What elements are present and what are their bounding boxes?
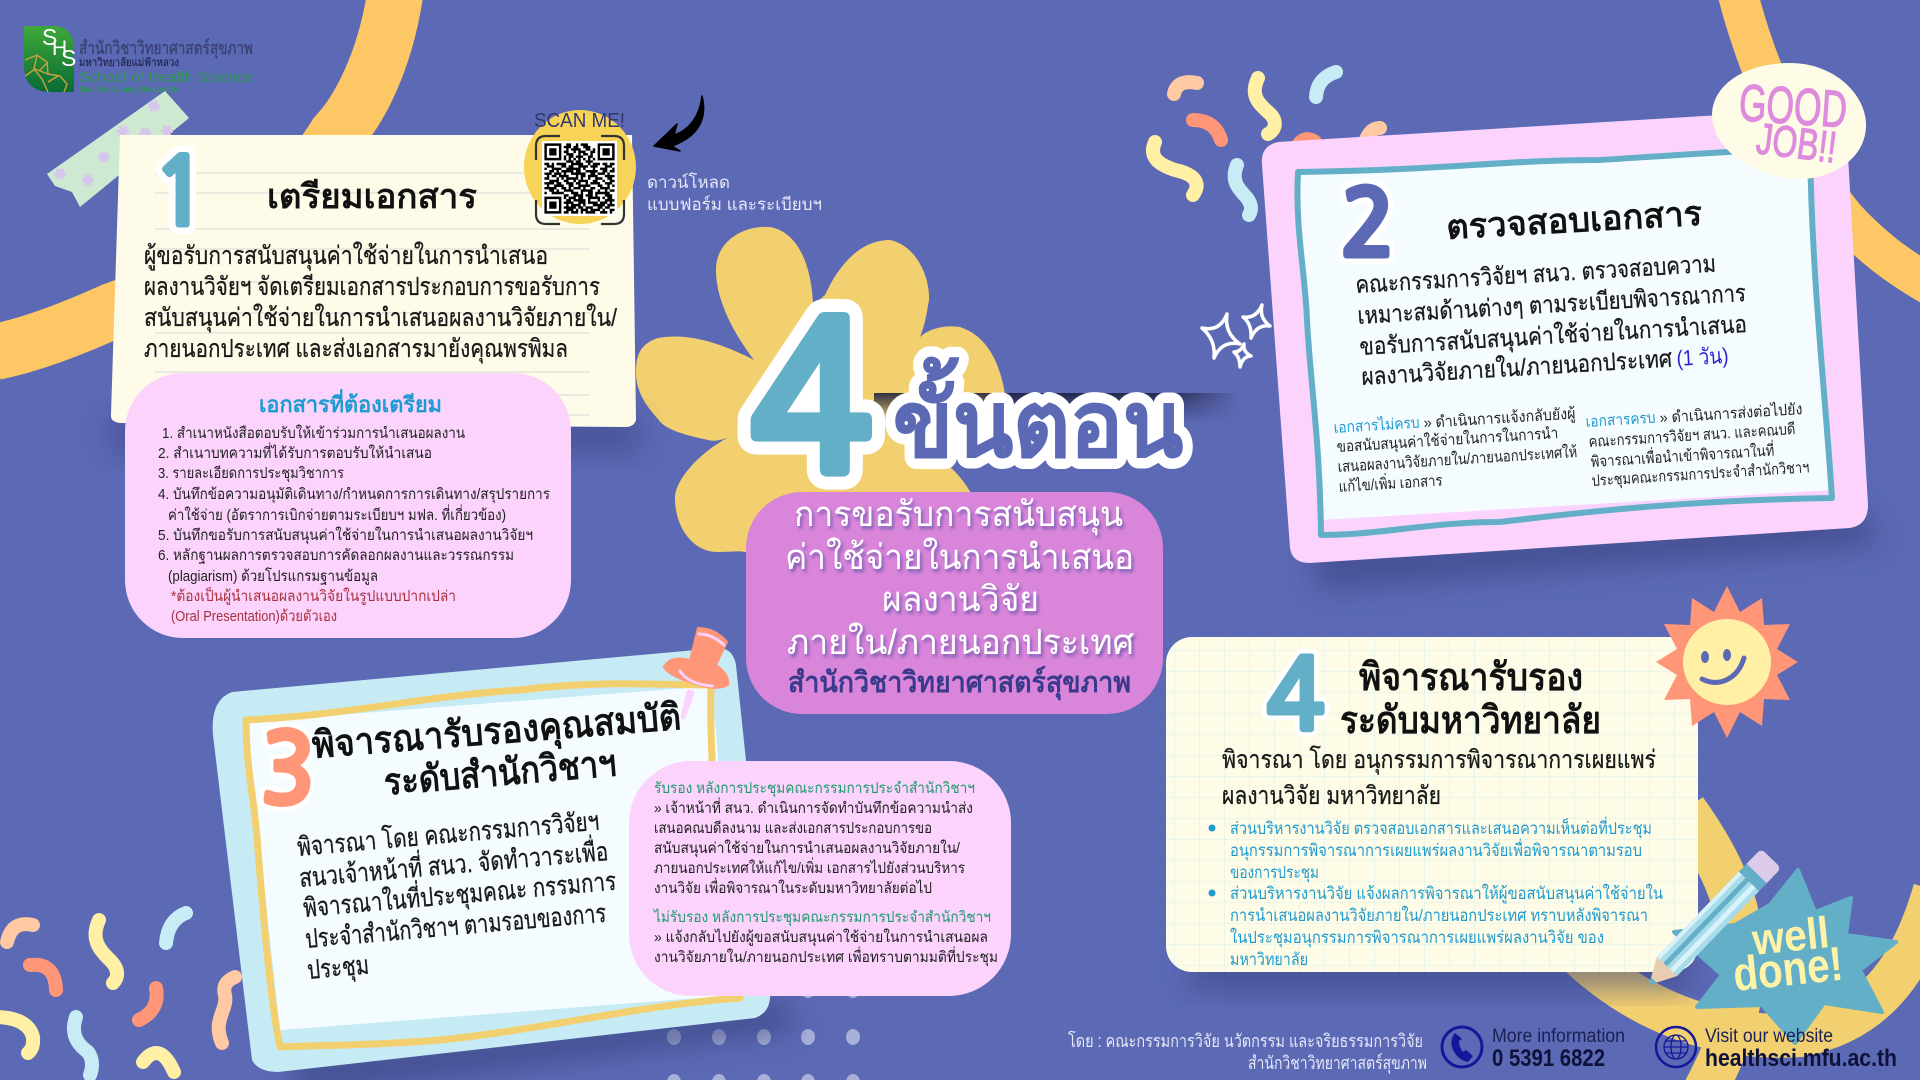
approved note: งานวิจัย เพื่อพิจารณาในระดับมหาวิทยาลัยต่อไป	[654, 877, 932, 897]
step 4 title: ระดับมหาวิทยาลัย	[1340, 700, 1601, 742]
approved note: เสนอคณบดีลงนาม และส่งเอกสารประกอบการขอ	[654, 820, 932, 837]
documents title: เอกสารที่ต้องเตรียม	[259, 388, 442, 417]
step 4 bullets	[1208, 816, 1663, 969]
credit text	[1068, 1030, 1427, 1074]
documents list: ค่าใช้จ่าย (อัตราการเบิกจ่ายตามระเบียบฯ มฟล. ที่เกี่ยวข้อง)	[168, 504, 506, 524]
step 4 title	[1340, 657, 1601, 742]
number 2: 2	[1340, 179, 1396, 270]
number 3: 3	[260, 723, 316, 819]
not approved note: งานวิจัยภายใน/ภายนอกประเทศ เพื่อทราบตามมติที่ประชุม	[654, 946, 998, 967]
good job badge: JOB!!	[1754, 114, 1839, 173]
panel: step 4	[1166, 637, 1698, 972]
icon: phone	[1442, 1027, 1482, 1067]
card 2 teal border	[1297, 148, 1832, 535]
panel: step 3	[213, 648, 770, 1072]
icon: pencil	[1639, 849, 1781, 995]
well done star	[1674, 870, 1896, 1043]
pushpin	[664, 628, 728, 717]
logo	[24, 24, 253, 94]
title: steps word: ขั้นตอน	[893, 357, 1183, 476]
subtitle school: สำนักวิชาวิทยาศาสตร์สุขภาพ	[788, 665, 1131, 700]
one day label: (1 วัน)	[1676, 343, 1729, 371]
download caption: ดาวน์โหลด	[647, 172, 730, 192]
arrow to QR	[654, 96, 704, 151]
panel: approval notes	[629, 761, 1011, 996]
step 2 body	[1355, 251, 1748, 391]
step 1 body: สนับสนุนค่าใช้จ่ายในการนำเสนอผลงานวิจัยภายใน/	[144, 303, 617, 333]
QR brackets	[536, 136, 624, 224]
documents list: 4. บันทึกข้อความอนุมัติเดินทาง/กำหนดการการเดินทาง/สรุปรายการ	[158, 486, 550, 504]
incomplete documents note	[1333, 405, 1578, 496]
QR block	[524, 110, 636, 224]
documents list: (Oral Presentation)ด้วยตัวเอง	[171, 608, 337, 625]
number 4: 4	[1266, 648, 1325, 745]
approved note: สนับสนุนค่าใช้จ่ายในการนำเสนอผลงานวิจัยภายใน/	[654, 839, 961, 858]
approved note: » เจ้าหน้าที่ สนว. ดำเนินการจัดทำบันทึกข้อความนำส่ง	[654, 797, 973, 817]
card 3 frame	[213, 648, 770, 1072]
flower	[636, 227, 1005, 560]
website info: Visit our website	[1705, 1026, 1833, 1047]
download caption: แบบฟอร์ม และระเบียบฯ	[647, 195, 822, 214]
shadow band behind title	[874, 393, 1235, 420]
step 4 body	[1222, 745, 1656, 810]
scan me label: SCAN ME!	[534, 110, 625, 132]
documents list	[158, 424, 550, 625]
good job badge: GOOD	[1737, 74, 1849, 140]
documents list: 3. รายละเอียดการประชุมวิชาการ	[158, 465, 344, 483]
card 3 yellow border	[246, 684, 740, 1047]
logo text	[79, 38, 253, 94]
not approved note	[653, 908, 998, 967]
step 3 title: ระดับสำนักวิชาฯ	[382, 743, 618, 803]
incomplete documents note: ขอสนับสนุนค่าใช้จ่ายในการในการนำ	[1336, 424, 1559, 457]
step 4 bullets: ในประชุมอนุกรรมการพิจารณาการเผยแพร่ผลงานวิจัย ของ	[1230, 927, 1604, 948]
logo text: School of Health Science	[79, 70, 253, 86]
step 4 title: พิจารณารับรอง	[1359, 657, 1583, 699]
step 3 body: สนวเจ้าหน้าที่ สนว. จัดทำวาระเพื่อ	[298, 833, 609, 893]
QR code	[542, 141, 617, 216]
confetti bottom left	[0, 913, 235, 1075]
number 4: 4	[1266, 648, 1325, 745]
complete documents note: » ดำเนินการส่งต่อไปยัง	[1659, 400, 1803, 427]
documents list: *ต้องเป็นผู้นำเสนอผลงานวิจัยในรูปแบบปากเปล่า	[171, 586, 456, 605]
step 1 body	[144, 241, 617, 364]
step 2 body: ขอรับการสนับสนุนค่าใช้จ่ายในการนำเสนอ	[1359, 310, 1748, 362]
panel: required documents	[125, 373, 571, 638]
incomplete documents note: แก้ไข/เพิ่ม เอกสาร	[1338, 470, 1443, 496]
title: big 4: 4	[749, 299, 874, 503]
complete documents note: เอกสารครบ	[1585, 410, 1656, 431]
dot rows	[667, 982, 860, 1080]
phone info	[1492, 1026, 1625, 1072]
subtitle lines: ผลงานวิจัย	[882, 580, 1039, 619]
icon: sun	[1656, 586, 1798, 738]
step 4 bullets: ส่วนบริหารงานวิจัย ตรวจสอบเอกสารและเสนอความเห็นต่อที่ประชุม	[1230, 816, 1652, 839]
bottom right yellow arcs	[1580, 810, 1920, 1080]
logo mark: H	[52, 37, 67, 60]
panel: step 2	[1262, 108, 1868, 563]
step 3 body: พิจารณา โดย คณะกรรมการวิจัยฯ	[296, 806, 600, 862]
complete documents note	[1585, 400, 1810, 491]
logo text: มหาวิทยาลัยแม่ฟ้าหลวง	[79, 57, 179, 69]
step 3 body: พิจารณาในที่ประชุมคณะ กรรมการ	[302, 863, 617, 924]
panel: center subtitle	[746, 492, 1163, 714]
number 1: 1	[152, 147, 209, 240]
card 2 shadow	[1310, 505, 1880, 590]
icon: globe	[1656, 1027, 1696, 1067]
approved note: ภายนอกประเทศให้แก้ไข/เพิ่ม เอกสารไปยังส่วนบริหาร	[654, 857, 965, 877]
phone info: 0 5391 6822	[1492, 1045, 1605, 1072]
panel 1 shadow	[110, 414, 640, 454]
good job badge	[1712, 63, 1866, 179]
approved note	[654, 780, 975, 897]
subtitle lines	[785, 495, 1134, 662]
confetti top right	[1153, 72, 1380, 215]
title: steps word: ขั้นตอน	[893, 357, 1183, 476]
website info	[1705, 1026, 1897, 1072]
number 2: 2	[1340, 179, 1396, 270]
step 2 body: เหมาะสมด้านต่างๆ ตามระเบียบพิจารณาการ	[1357, 280, 1747, 330]
step 3 title: พิจารณารับรองคุณสมบัติ	[310, 696, 683, 769]
number 1: 1	[152, 147, 209, 240]
incomplete documents note: » ดำเนินการแจ้งกลับยังผู้	[1423, 405, 1576, 433]
panel: step 1 note	[111, 135, 636, 427]
credit text: สำนักวิชาวิทยาศาสตร์สุขภาพ	[1248, 1053, 1427, 1074]
not approved note: ไม่รับรอง หลังการประชุมคณะกรรมการประจำสำนักวิชาฯ	[653, 908, 991, 927]
step 4 bullets: การนำเสนอผลงานวิจัยภายใน/ภายนอกประเทศ ทราบหลังพิจารณา	[1230, 905, 1648, 925]
subtitle lines: ภายใน/ภายนอกประเทศ	[787, 622, 1134, 662]
tape	[47, 91, 189, 207]
approved note: รับรอง หลังการประชุมคณะกรรมการประจำสำนักวิชาฯ	[654, 780, 975, 798]
sparkles	[1202, 305, 1270, 367]
card 4 paper	[1166, 637, 1698, 972]
top right yellow arc	[1738, 0, 1920, 285]
website info: healthsci.mfu.ac.th	[1705, 1045, 1897, 1072]
download caption	[647, 172, 822, 214]
documents list: 6. หลักฐานผลการตรวจสอบการคัดลอกผลงานและวรรณกรรม	[158, 547, 514, 564]
card 4 shadow	[1190, 950, 1690, 990]
documents list: 2. สำเนาบทความที่ได้รับการตอบรับให้นำเสนอ	[158, 442, 432, 462]
step 1 body: ผู้ขอรับการสนับสนุนค่าใช้จ่ายในการนำเสนอ	[144, 241, 548, 271]
complete documents note: คณะกรรมการวิจัยฯ สนว. และคณบดี	[1588, 421, 1796, 451]
incomplete documents note: เสนอผลงานวิจัยภายใน/ภายนอกประเทศให้	[1337, 443, 1578, 476]
complete documents note: พิจารณาเพื่อนำเข้าพิจารณาในที่	[1590, 439, 1775, 471]
step 2 body: ผลงานวิจัยภายใน/ภายนอกประเทศ	[1361, 345, 1673, 391]
step 4 bullets: มหาวิทยาลัย	[1230, 950, 1308, 969]
step 4 bullets: ของการประชุม	[1230, 863, 1319, 883]
logo mark: S	[42, 24, 57, 50]
subtitle lines: การขอรับการสนับสนุน	[794, 495, 1123, 535]
yellow blob	[524, 110, 636, 224]
step 2 body: คณะกรรมการวิจัยฯ สนว. ตรวจสอบความ	[1355, 251, 1717, 299]
number 3: 3	[260, 723, 316, 819]
logo text: สำนักวิชาวิทยาศาสตร์สุขภาพ	[79, 38, 253, 59]
step 4 body: ผลงานวิจัย มหาวิทยาลัย	[1222, 782, 1441, 810]
complete documents note: ประชุมคณะกรรมการประจำสำนักวิชาฯ	[1591, 459, 1810, 491]
card 2 frame	[1262, 108, 1868, 563]
step 1 body: ภายนอกประเทศ และส่งเอกสารมายังคุณพรพิมล	[144, 335, 568, 364]
card 3 paper	[246, 686, 738, 1030]
step 4 bullets: ส่วนบริหารงานวิจัย แจ้งผลการพิจารณาให้ผู้ขอสนับสนุนค่าใช้จ่ายใน	[1230, 883, 1663, 904]
step 3 title	[310, 696, 683, 803]
step 3 body: ประชุม	[306, 950, 370, 986]
step 4 body: พิจารณา โดย อนุกรรมการพิจารณาการเผยแพร่	[1222, 745, 1656, 775]
credit text: โดย : คณะกรรมการวิจัย นวัตกรรม และจริยธรรมการวิจัย	[1068, 1030, 1423, 1051]
step 3 body: ประจำสำนักวิชาฯ ตามรอบของการ	[304, 898, 607, 954]
step 4 bullets: อนุกรรมการพิจารณาการเผยแพร่ผลงานวิจัยเพื่อพิจารณาตามรอบ	[1230, 838, 1642, 861]
step 1 title: เตรียมเอกสาร	[267, 178, 478, 216]
logo mark: S	[61, 45, 76, 71]
not approved note: » แจ้งกลับไปยังผู้ขอสนับสนุนค่าใช้จ่ายในการนำเสนอผล	[654, 928, 988, 947]
logo text: Mae Fah Luang University	[79, 85, 179, 94]
card 2 paper	[1298, 148, 1833, 520]
documents list: (plagiarism) ด้วยโปรแกรมฐานข้อมูล	[168, 567, 378, 585]
documents list: 5. บันทึกขอรับการสนับสนุนค่าใช้จ่ายในการนำเสนอผลงานวิจัยฯ	[158, 526, 533, 545]
subtitle lines: ค่าใช้จ่ายในการนำเสนอ	[785, 537, 1134, 577]
documents list: 1. สำเนาหนังสือตอบรับให้เข้าร่วมการนำเสนอผลงาน	[162, 424, 465, 442]
well done star: well	[1749, 908, 1832, 965]
step 3 body	[296, 806, 617, 986]
note paper	[111, 135, 636, 427]
incomplete documents note: เอกสารไม่ครบ	[1333, 414, 1420, 437]
well done star: done!	[1731, 938, 1846, 1002]
title: big 4: 4	[749, 299, 874, 503]
logo mark	[24, 24, 76, 92]
step 1 body: ผลงานวิจัยฯ จัดเตรียมเอกสารประกอบการขอรับการ	[144, 273, 600, 301]
step 2 title: ตรวจสอบเอกสาร	[1445, 195, 1704, 247]
phone info: More information	[1492, 1026, 1625, 1047]
top left yellow arc	[0, 0, 395, 352]
card 3 shadow	[290, 1000, 800, 1080]
